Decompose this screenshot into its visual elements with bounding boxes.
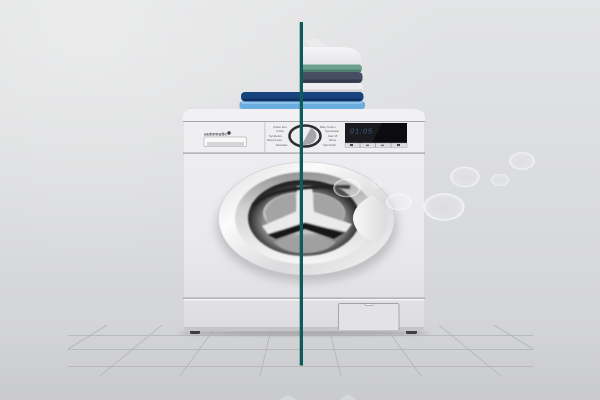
white shirt	[300, 47, 361, 64]
washing machine	[183, 107, 425, 334]
program labels: Rinse	[329, 138, 337, 142]
program labels: Baby Cotton	[320, 125, 336, 129]
program labels: Cotton	[276, 129, 285, 133]
green garment	[300, 64, 362, 72]
floor shadow under machine	[179, 330, 429, 336]
door ring	[218, 162, 394, 275]
machine feet	[190, 330, 417, 334]
navy towel	[241, 92, 364, 102]
faint marks at bottom	[279, 394, 357, 400]
program labels: Cotton Eco	[273, 125, 287, 129]
base divider	[183, 298, 425, 299]
grey garment	[300, 72, 362, 83]
program labels: Synthetics	[269, 134, 283, 138]
program labels	[267, 125, 339, 147]
centre divider line	[300, 22, 303, 366]
brand logo: automatic	[204, 132, 228, 136]
program labels: Fast 15	[328, 134, 338, 138]
floor tile grid	[68, 325, 533, 376]
program labels: Delicates	[276, 143, 288, 147]
door shadow	[217, 170, 397, 282]
control panel	[184, 122, 424, 153]
drum	[248, 180, 360, 256]
light blue towel	[240, 102, 365, 109]
service hatch	[338, 304, 399, 330]
display	[345, 123, 407, 148]
soap bubbles	[333, 152, 535, 221]
detergent drawer	[204, 137, 246, 146]
display: 01:05	[350, 126, 373, 136]
machine body	[184, 122, 424, 331]
program dial	[290, 126, 320, 146]
white garment	[300, 83, 363, 92]
shirt collar	[305, 38, 326, 47]
water splash disc	[353, 195, 387, 242]
machine top	[183, 107, 425, 121]
folded clothes stack	[240, 38, 365, 109]
program labels: Spin Drain	[323, 143, 337, 147]
program labels: Sportswear	[325, 129, 339, 133]
program labels: Mixed Load	[267, 138, 282, 142]
